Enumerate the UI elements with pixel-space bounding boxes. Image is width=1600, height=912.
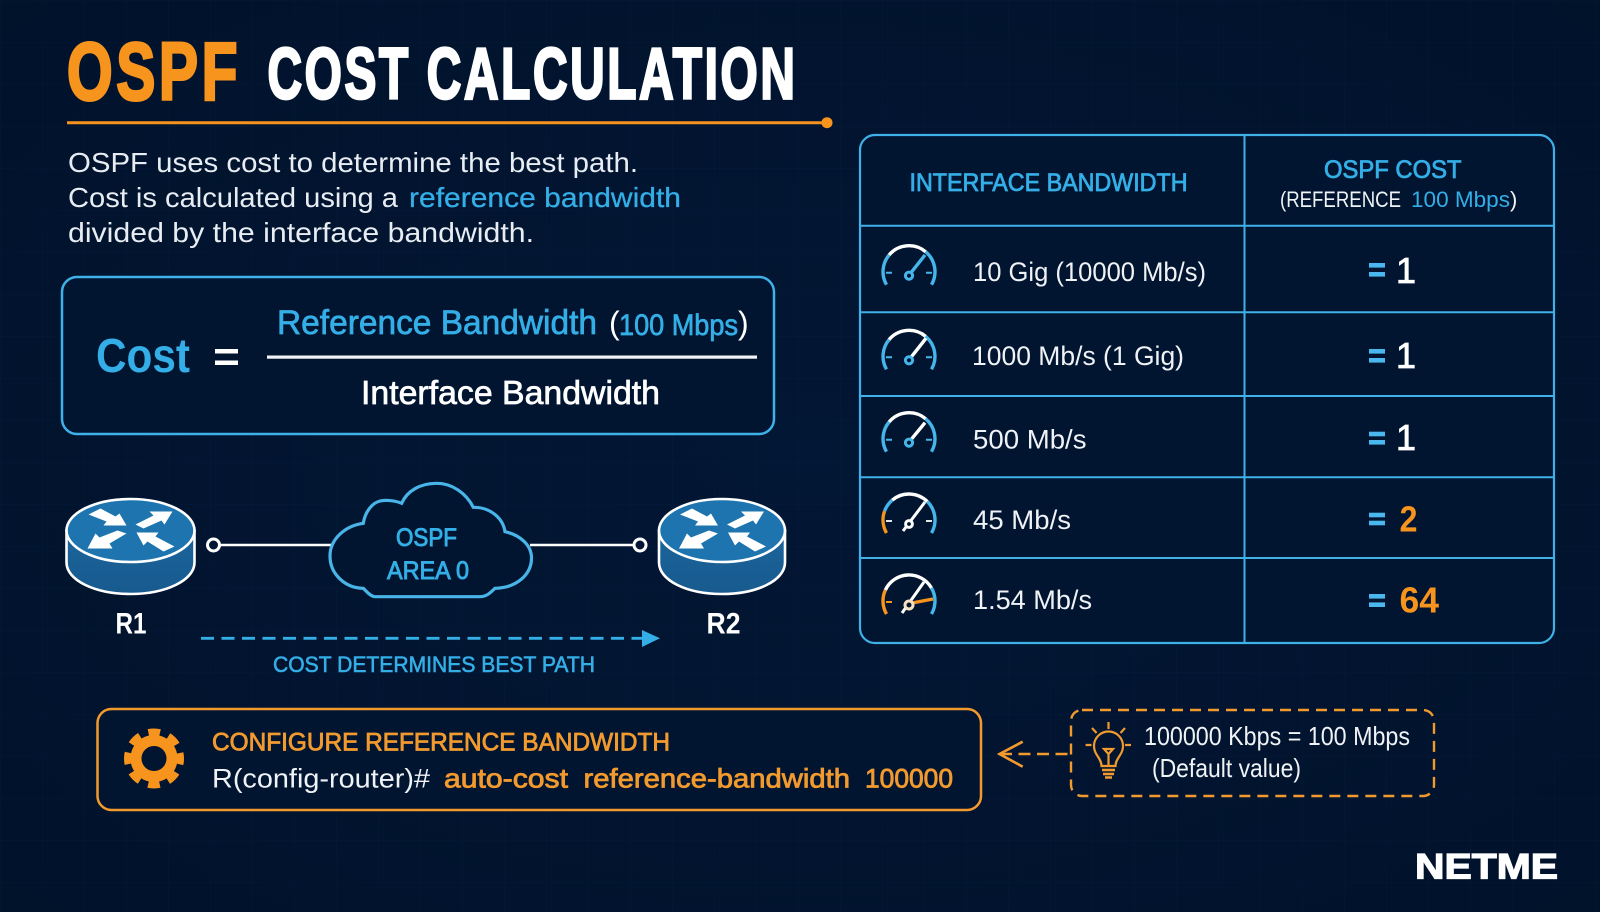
numerator: 100 Mbps bbox=[619, 309, 738, 342]
cost value bbox=[1369, 417, 1416, 458]
row: 1000 Mb/s bbox=[883, 330, 1416, 376]
arrow: note to config bbox=[1000, 742, 1071, 767]
table header: OSPF cost: ) bbox=[1510, 187, 1517, 212]
numerator: ( bbox=[609, 305, 620, 341]
icon: router R2 bbox=[659, 499, 785, 594]
intro text: OSPF uses cost to determine the best path. bbox=[68, 147, 638, 178]
panel: cost table bbox=[860, 135, 1554, 643]
icon: gauge bbox=[883, 575, 935, 614]
caption: best path: COST DETERMINES BEST PATH bbox=[273, 652, 595, 677]
panel: formula bbox=[62, 277, 774, 434]
cost value: 1 bbox=[1396, 250, 1416, 291]
callout text: (Default value) bbox=[1152, 753, 1301, 783]
denominator: Interface Bandwidth bbox=[361, 374, 660, 411]
cost value: 2 bbox=[1400, 499, 1418, 540]
config command: 100000 bbox=[865, 764, 953, 794]
row: 500 Mb/s: 500 Mb/s bbox=[973, 424, 1086, 454]
row: 500 Mb/s bbox=[883, 413, 1416, 458]
table header: OSPF cost bbox=[1280, 156, 1517, 212]
label R2: R2 bbox=[706, 608, 740, 640]
row: 1000 Mb/s: 1000 Mb/s (1 Gig) bbox=[972, 341, 1184, 371]
config command bbox=[212, 764, 953, 794]
numerator bbox=[277, 304, 749, 342]
row: 10 Gig bbox=[883, 246, 1416, 291]
config command: R(config-router)# bbox=[212, 764, 430, 794]
cost value: 64 bbox=[1400, 580, 1439, 621]
logo: NETME: NETME bbox=[1415, 847, 1558, 886]
title underline bbox=[67, 117, 832, 128]
row: 10 Gig: 10 Gig (10000 Mb/s) bbox=[973, 257, 1206, 287]
table header: interface bandwidth: INTERFACE BANDWIDTH bbox=[910, 169, 1188, 197]
row: 1.54 Mb/s: 1.54 Mb/s bbox=[973, 585, 1092, 615]
config heading: CONFIGURE REFERENCE BANDWIDTH bbox=[212, 729, 670, 757]
intro text bbox=[68, 147, 681, 248]
table header: OSPF cost: OSPF COST bbox=[1324, 156, 1462, 184]
icon: gauge bbox=[883, 246, 935, 285]
intro text: Cost is calculated using a bbox=[68, 182, 398, 213]
intro text: divided by the interface bandwidth. bbox=[68, 217, 534, 248]
title bbox=[67, 26, 798, 118]
icon: router R1 bbox=[66, 499, 194, 594]
network diagram bbox=[66, 483, 785, 677]
numerator: Reference Bandwidth bbox=[277, 304, 597, 342]
table header: OSPF cost: (REFERENCE bbox=[1280, 187, 1401, 212]
intro text: reference bandwidth bbox=[409, 182, 681, 213]
row: 45 Mb/s bbox=[883, 494, 1418, 540]
config command: reference-bandwidth bbox=[584, 764, 850, 794]
callout: default value bbox=[1071, 710, 1434, 796]
icon: gauge bbox=[883, 494, 935, 533]
cost value bbox=[1369, 499, 1418, 540]
icon: gauge bbox=[883, 413, 935, 452]
link cloud to R2 bbox=[530, 539, 646, 551]
fraction bar bbox=[267, 356, 757, 359]
cost value bbox=[1369, 580, 1439, 621]
equals sign bbox=[215, 349, 238, 365]
icon: cloud OSPF area 0: AREA 0 bbox=[387, 557, 469, 585]
cost value: 1 bbox=[1396, 417, 1416, 458]
row: 45 Mb/s: 45 Mb/s bbox=[973, 505, 1071, 535]
icon: cloud OSPF area 0 bbox=[330, 483, 532, 597]
numerator: ) bbox=[738, 305, 749, 341]
cost value bbox=[1369, 250, 1416, 291]
label R1: R1 bbox=[116, 608, 146, 640]
row: 1.54 Mb/s bbox=[883, 575, 1439, 621]
icon: gear bbox=[128, 732, 180, 784]
title: COST CALCULATION bbox=[268, 34, 798, 115]
arrow: best path bbox=[201, 630, 660, 647]
callout text: 100000 Kbps = 100 Mbps bbox=[1144, 721, 1410, 751]
link R1 to cloud bbox=[208, 539, 332, 551]
cost value: 1 bbox=[1396, 335, 1416, 376]
panel: configure reference bandwidth bbox=[98, 709, 981, 810]
icon: gauge bbox=[883, 330, 935, 369]
icon: cloud OSPF area 0: OSPF bbox=[396, 524, 457, 552]
cost value bbox=[1369, 335, 1416, 376]
title: OSPF bbox=[67, 26, 241, 118]
callout text bbox=[1144, 721, 1410, 783]
formula label: Cost: Cost bbox=[96, 330, 190, 383]
config command: auto-cost bbox=[444, 764, 569, 794]
icon: light bulb bbox=[1086, 722, 1131, 778]
table header: OSPF cost: 100 Mbps bbox=[1411, 187, 1510, 212]
